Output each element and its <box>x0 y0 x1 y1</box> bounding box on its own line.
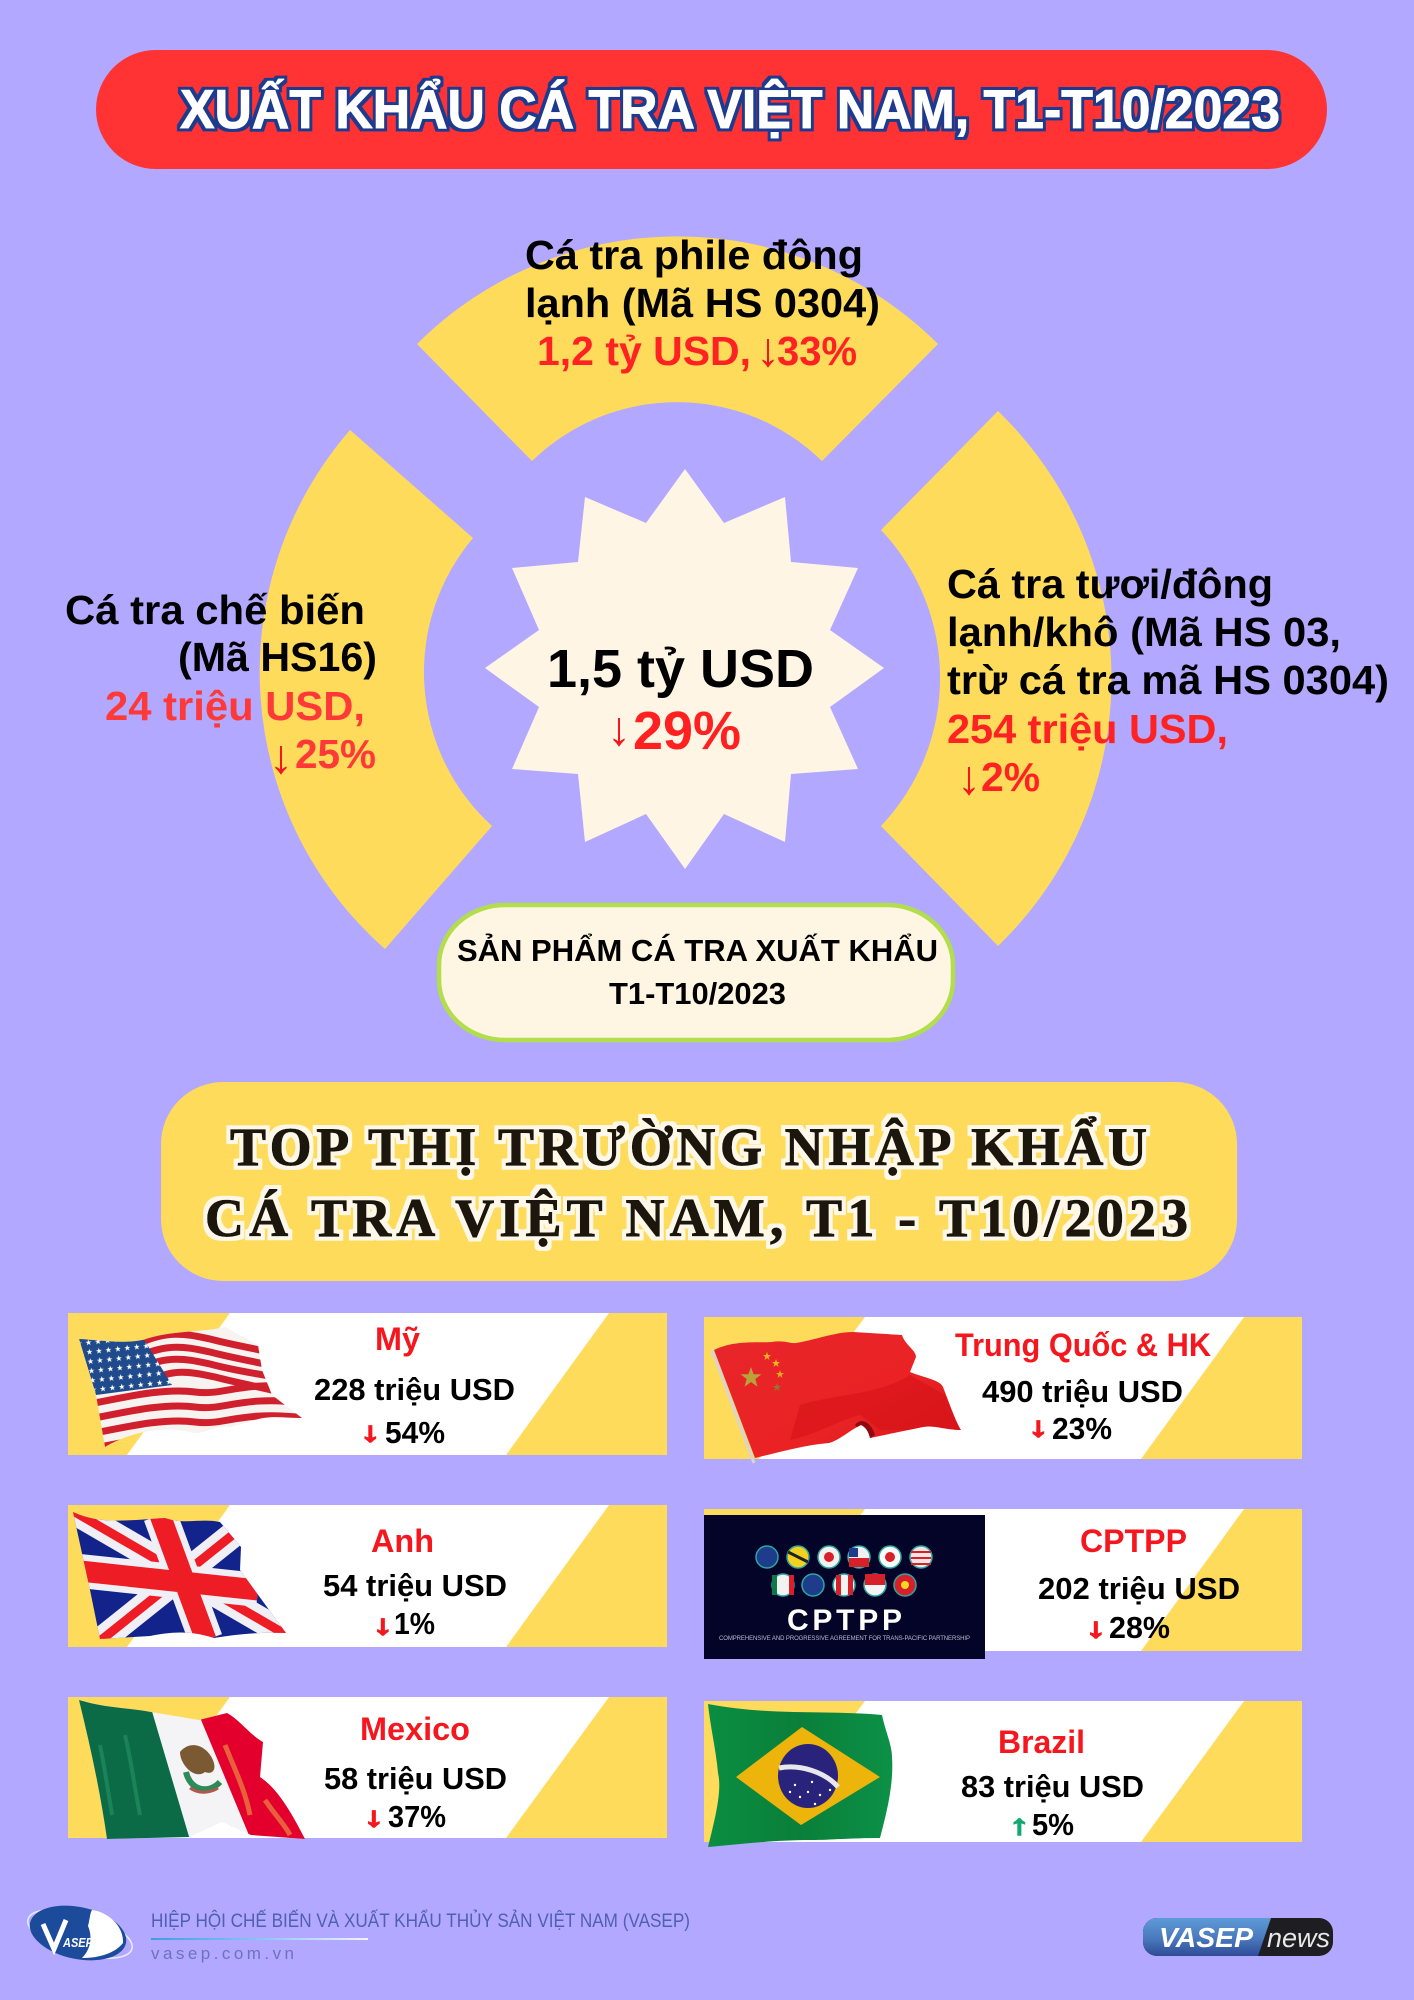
label: processed: 25% <box>295 731 376 777</box>
footer: VASEP news badge <box>1143 1918 1333 1956</box>
label: frozen fillet <box>525 232 880 377</box>
market name: Anh <box>371 1523 434 1559</box>
label: processed: 24 triệu USD, <box>105 683 365 729</box>
market name: Trung Quốc & HK <box>955 1327 1211 1363</box>
caption pill <box>439 905 953 1040</box>
emblem subtitle: COMPREHENSIVE AND PROGRESSIVE AGREEMENT FOR TRANS-PACIFIC PARTNERSHIP <box>719 1636 970 1642</box>
label: frozen fillet: 1,2 tỷ USD, <box>537 328 751 374</box>
label: fresh frozen dried: 254 triệu USD, <box>947 706 1228 752</box>
label: fresh frozen dried: 2% <box>981 754 1040 800</box>
change arrow down: ↓ <box>360 1417 380 1447</box>
section heading: CÁ TRA VIỆT NAM, T1 - T10/2023 <box>205 1188 1188 1248</box>
arc segment: left <box>260 430 492 949</box>
centre total value: 29% <box>633 701 741 761</box>
change percent: 23% <box>1052 1411 1112 1446</box>
centre total value: ↓ <box>607 703 631 756</box>
centre starburst <box>485 469 884 869</box>
flag: Brazil <box>708 1704 892 1847</box>
flag: Mexico <box>79 1700 305 1839</box>
change arrow down: ↓ <box>373 1610 393 1640</box>
card: Anh <box>65 1505 667 1647</box>
title banner <box>96 50 1327 169</box>
market name: Mexico <box>360 1711 470 1747</box>
footer: VASEP news badge: VASEP <box>1159 1922 1253 1953</box>
centre total value <box>547 639 814 761</box>
change percent: 5% <box>1032 1807 1074 1842</box>
value: 490 triệu USD <box>982 1374 1183 1409</box>
market name: Mỹ <box>375 1321 420 1357</box>
footer: VASEP logo <box>23 1897 137 1969</box>
change arrow up: ↑ <box>1010 1810 1030 1840</box>
panel: product ring <box>65 232 1389 949</box>
section heading: TOP THỊ TRƯỜNG NHẬP KHẨU <box>230 1116 1147 1177</box>
member flag badges <box>756 1546 932 1596</box>
change arrow down: ↓ <box>364 1802 384 1832</box>
value: 83 triệu USD <box>961 1769 1144 1804</box>
value: 202 triệu USD <box>1038 1571 1240 1606</box>
label: fresh frozen dried: trừ cá tra mã HS 0304) <box>947 657 1389 703</box>
card: Mỹ <box>68 1313 667 1455</box>
change percent: 28% <box>1109 1610 1170 1645</box>
arc segment: right <box>881 411 1111 946</box>
label: processed: (Mã HS16) <box>178 634 377 680</box>
market name: CPTPP <box>1080 1523 1187 1559</box>
title text: XUẤT KHẨU CÁ TRA VIỆT NAM, T1-T10/2023 <box>180 78 1280 140</box>
flag: USA <box>79 1327 302 1447</box>
value: 54 triệu USD <box>323 1568 507 1603</box>
label: fresh frozen dried <box>947 561 1389 805</box>
change arrow down: ↓ <box>1086 1613 1106 1643</box>
label: fresh frozen dried: ↓ <box>957 752 981 805</box>
label: processed <box>65 587 377 784</box>
caption pill: T1-T10/2023 <box>609 976 786 1011</box>
footer: organisation name: HIỆP HỘI CHẾ BIẾN VÀ XUẤT KHẨU THỦY SẢN VIỆT NAM (VASEP) <box>151 1910 690 1932</box>
caption pill: SẢN PHẨM CÁ TRA XUẤT KHẨU <box>457 933 938 968</box>
emblem wordmark: CPTPP <box>787 1604 902 1637</box>
centre total value: 1,5 tỷ USD <box>547 639 814 699</box>
label: frozen fillet: 33% <box>777 328 857 374</box>
card: Brazil <box>700 1700 1302 1850</box>
card: Trung Quốc & HK <box>704 1317 1302 1465</box>
card: CPTPP <box>704 1509 1302 1659</box>
value: 228 triệu USD <box>314 1372 515 1407</box>
market name: Brazil <box>998 1724 1085 1760</box>
CPTPP emblem <box>704 1515 985 1659</box>
label: processed: Cá tra chế biến <box>65 587 365 633</box>
value: 58 triệu USD <box>324 1761 507 1796</box>
section heading <box>161 1082 1237 1281</box>
footer: VASEP news badge: news <box>1267 1923 1330 1953</box>
label: frozen fillet: ↓ <box>756 324 780 377</box>
change arrow down: ↓ <box>1028 1412 1048 1442</box>
flag: UK <box>73 1512 286 1639</box>
label: frozen fillet: lạnh (Mã HS 0304) <box>525 280 880 326</box>
change percent: 54% <box>385 1415 445 1450</box>
label: fresh frozen dried: lạnh/khô (Mã HS 03, <box>947 609 1341 655</box>
change percent: 1% <box>394 1606 435 1641</box>
label: processed: ↓ <box>269 731 293 784</box>
footer: VASEP logo: ASEP <box>62 1935 93 1950</box>
label: frozen fillet: Cá tra phile đông <box>525 232 863 278</box>
label: fresh frozen dried: Cá tra tươi/đông <box>947 561 1273 607</box>
card: Mexico <box>68 1695 667 1845</box>
flag: China <box>710 1325 965 1465</box>
arc segment: top <box>417 236 938 461</box>
change percent: 37% <box>388 1799 446 1834</box>
footer: website: vasep.com.vn <box>151 1944 294 1963</box>
